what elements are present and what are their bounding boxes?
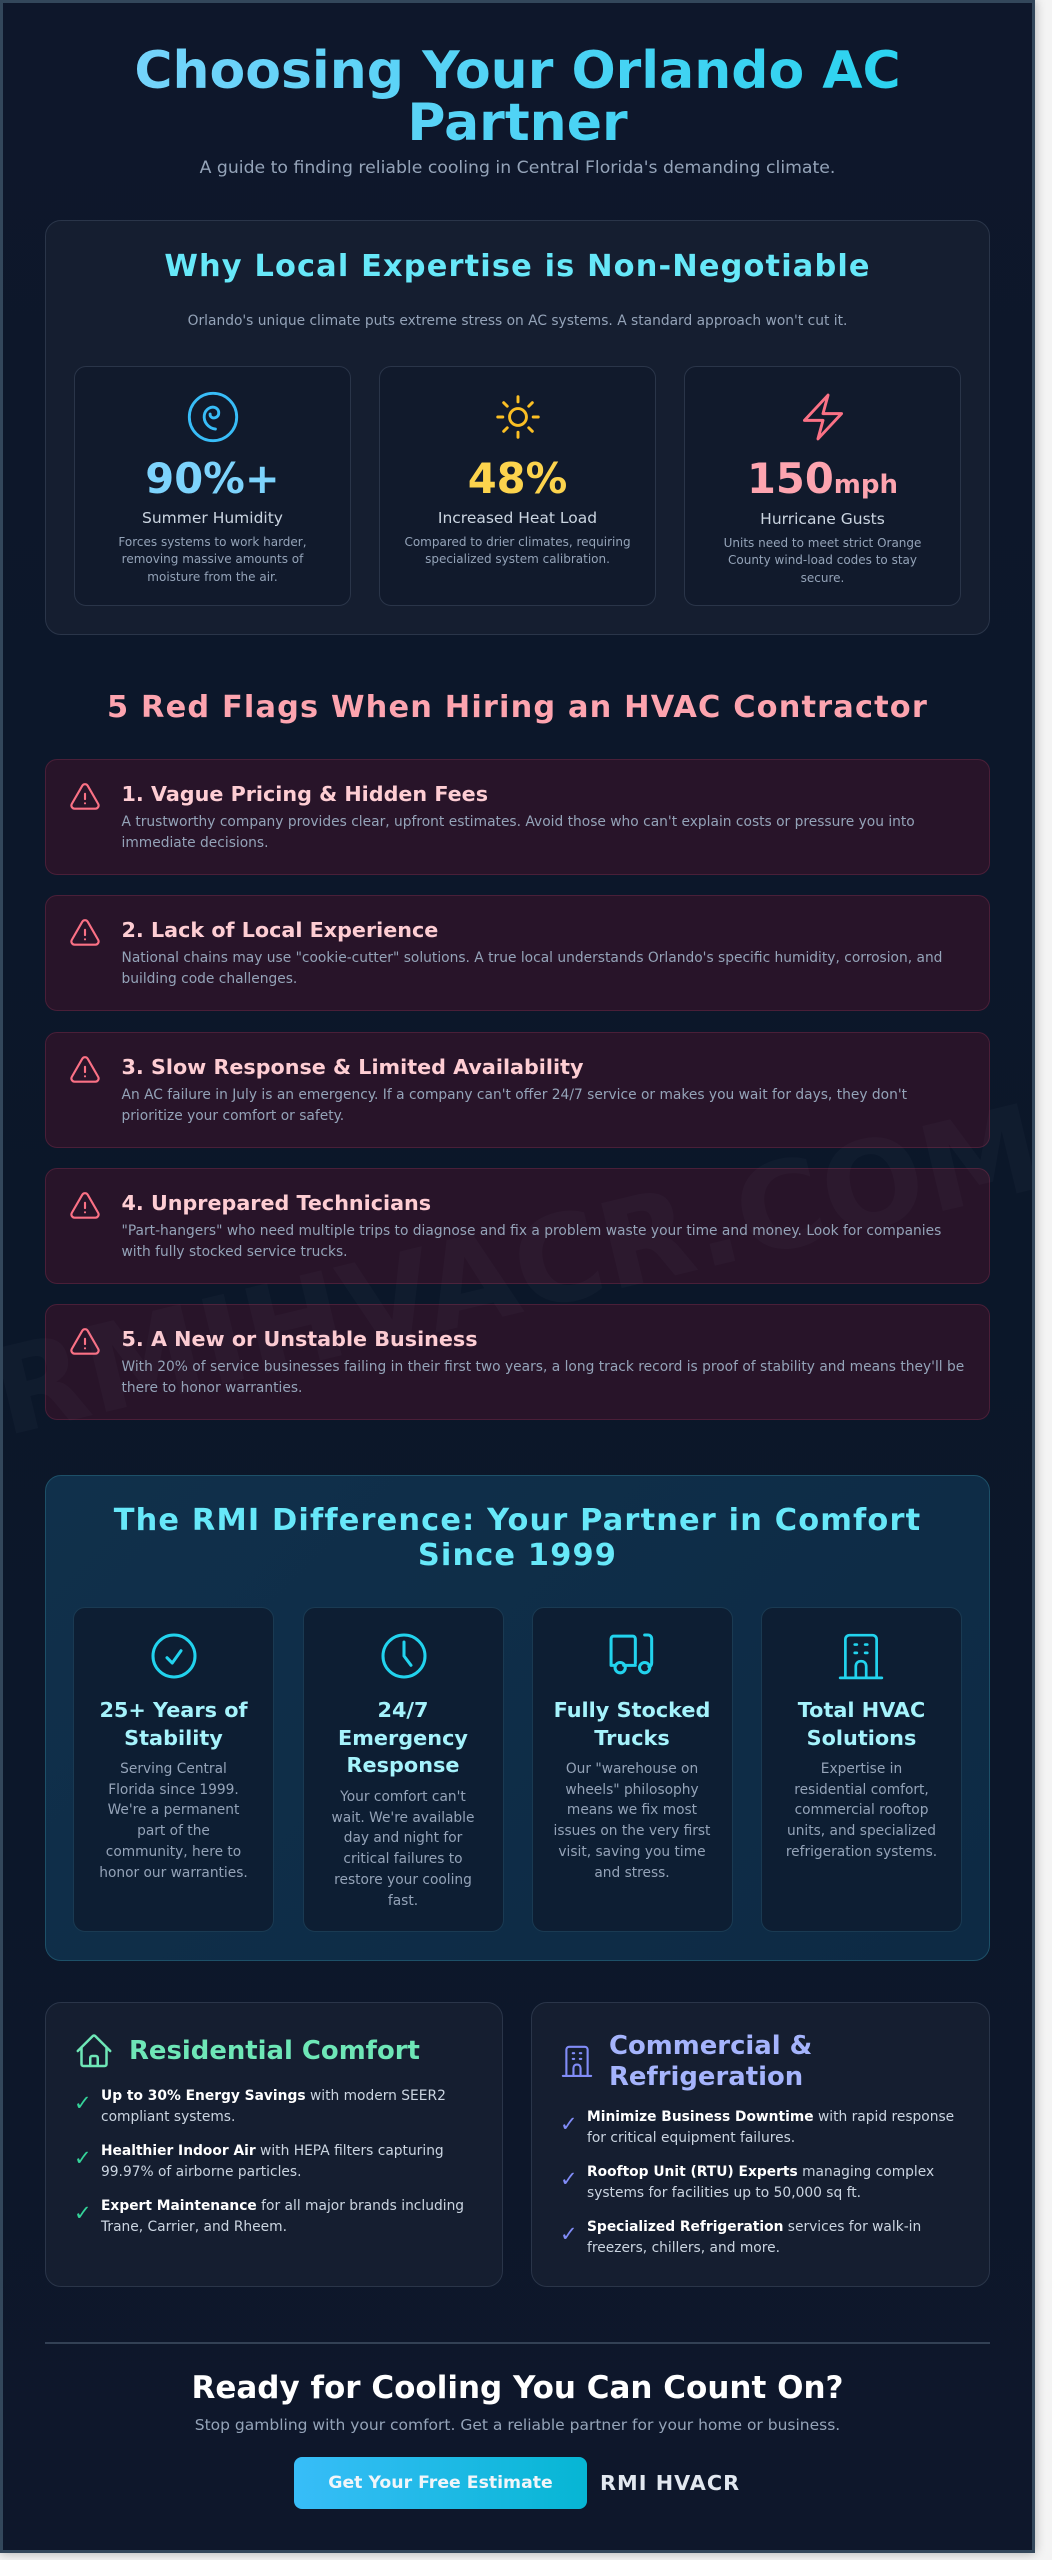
- benefit text: freezers, chillers, and more.: [587, 2240, 780, 2256]
- footer call to action: [45, 2365, 990, 2515]
- icon: truck: [610, 1634, 654, 1674]
- stat description: [118, 535, 307, 584]
- benefit text: Expert Maintenance for all major brands including: [101, 2198, 464, 2214]
- stat description: County wind-load codes to stay: [728, 553, 917, 567]
- stat number: 90%+: [145, 454, 280, 503]
- card text: fast.: [388, 1893, 418, 1909]
- stat label: Increased Heat Load: [438, 509, 597, 527]
- flag description: [122, 814, 915, 851]
- stat card: heat load: [379, 366, 656, 606]
- red flag 3: [45, 1032, 990, 1148]
- icon: warning: [70, 919, 100, 946]
- CTA heading: Ready for Cooling You Can Count On?: [191, 2370, 844, 2406]
- card title: Stability: [124, 1726, 223, 1750]
- card text: means we fix most: [567, 1802, 697, 1818]
- heading: Why Local Expertise is Non-Negotiable: [164, 249, 871, 284]
- benefit text: Healthier Indoor Air with HEPA filters capturing: [101, 2143, 444, 2159]
- card text: issues on the very first: [554, 1823, 710, 1839]
- check mark: ✓: [74, 2201, 92, 2225]
- card text: We're a permanent: [108, 1802, 239, 1818]
- benefit text: Minimize Business Downtime with rapid response: [587, 2109, 954, 2125]
- card text: community, here to: [106, 1844, 241, 1860]
- check mark: ✓: [74, 2146, 92, 2170]
- flag title: 3. Slow Response & Limited Availability: [122, 1055, 583, 1079]
- difference card: stability: [73, 1607, 274, 1932]
- benefit 1: [560, 2107, 980, 2149]
- flag description: [122, 1359, 964, 1396]
- card text: Your comfort can't: [340, 1789, 466, 1805]
- benefit text: [587, 2162, 934, 2203]
- subtitle: A guide to finding reliable cooling in Central Florida's demanding climate.: [200, 158, 835, 178]
- stat number: 150mph: [747, 454, 898, 503]
- icon: warning: [70, 1328, 100, 1355]
- benefit text: systems for facilities up to 50,000 sq ft.: [587, 2185, 861, 2201]
- card text: wheels" philosophy: [565, 1782, 699, 1798]
- card title: Trucks: [594, 1726, 670, 1750]
- card text: restore your cooling: [334, 1872, 472, 1888]
- stat description: moisture from the air.: [147, 570, 278, 584]
- CTA subtext: Stop gambling with your comfort. Get a reliable partner for your home or business.: [195, 2416, 840, 2434]
- card text: [332, 1789, 474, 1909]
- benefit 3: [560, 2217, 980, 2259]
- flag description: with fully stocked service trucks.: [122, 1244, 348, 1260]
- flag description: "Part-hangers" who need multiple trips to diagnose and fix a problem waste your time and money. Look for companies: [122, 1223, 941, 1239]
- card text: and stress.: [594, 1865, 670, 1881]
- icon: clock: [382, 1634, 426, 1678]
- difference card: emergency response: [302, 1607, 504, 1932]
- title: Partner: [407, 93, 628, 153]
- stat number: 48%: [468, 454, 567, 503]
- stat description: removing massive amounts of: [122, 552, 303, 566]
- card title: [554, 1698, 710, 1750]
- brand name: RMI HVACR: [600, 2471, 740, 2495]
- benefit text: Rooftop Unit (RTU) Experts managing complex: [587, 2164, 934, 2180]
- stat card: hurricane gusts: [684, 366, 961, 606]
- CTA button: [294, 2457, 587, 2509]
- panel: why local expertise: [45, 220, 990, 635]
- heading: The RMI Difference: Your Partner in Comfort: [114, 1503, 921, 1538]
- card text: residential comfort,: [794, 1782, 929, 1798]
- card text: Our "warehouse on: [566, 1761, 698, 1777]
- card title: Solutions: [807, 1726, 916, 1750]
- benefit text: 99.97% of airborne particles.: [101, 2164, 302, 2180]
- flag title: 1. Vague Pricing & Hidden Fees: [122, 782, 488, 806]
- benefit text: Trane, Carrier, and Rheem.: [101, 2219, 287, 2235]
- card text: wait. We're available: [332, 1810, 474, 1826]
- benefit text: [587, 2107, 954, 2148]
- flag title: 5. A New or Unstable Business: [122, 1327, 478, 1351]
- flag description: An AC failure in July is an emergency. If a company can't offer 24/7 service or makes you wait for days, they don't: [122, 1087, 907, 1103]
- panel title: [609, 2031, 812, 2092]
- flag description: National chains may use "cookie-cutter" solutions. A true local understands Orlando's specific humidity, corrosion, and: [122, 950, 942, 966]
- flag description: [122, 950, 942, 987]
- title: Choosing Your Orlando AC: [134, 41, 901, 101]
- benefit text: Specialized Refrigeration services for walk-in: [587, 2219, 921, 2235]
- check mark: ✓: [560, 2167, 578, 2191]
- flag description: there to honor warranties.: [122, 1380, 302, 1396]
- card text: day and night for: [344, 1830, 462, 1846]
- heading: Since 1999: [418, 1538, 617, 1572]
- difference card: stocked trucks: [532, 1607, 732, 1932]
- benefit 2: [560, 2162, 980, 2204]
- icon: home: [76, 2034, 112, 2068]
- panel title: Commercial &: [609, 2031, 812, 2061]
- card title: Total HVAC: [798, 1698, 925, 1722]
- card title: 24/7: [377, 1698, 428, 1722]
- red flag 5: [45, 1304, 990, 1420]
- benefit 2: [74, 2143, 444, 2180]
- card text: part of the: [137, 1823, 210, 1839]
- card title: [338, 1698, 468, 1777]
- flag description: prioritize your comfort or safety.: [122, 1108, 344, 1124]
- card text: units, and specialized: [787, 1823, 936, 1839]
- stat description: Compared to drier climates, requiring: [404, 535, 631, 549]
- panel title: Residential Comfort: [129, 2036, 420, 2066]
- benefit text: [101, 2088, 446, 2125]
- card text: commercial rooftop: [795, 1802, 928, 1818]
- icon: check circle: [152, 1634, 196, 1678]
- card title: [798, 1698, 925, 1750]
- icon: sun: [496, 395, 540, 439]
- card text: visit, saving you time: [558, 1844, 706, 1860]
- card text: honor our warranties.: [99, 1865, 248, 1881]
- icon: warning: [70, 783, 100, 810]
- card title: Emergency: [338, 1726, 468, 1750]
- heading: [114, 1503, 921, 1572]
- card text: Expertise in: [821, 1761, 902, 1777]
- CTA button: Get Your Free Estimate: [328, 2473, 553, 2493]
- flag description: [122, 1223, 941, 1260]
- flag title: 4. Unprepared Technicians: [122, 1191, 431, 1215]
- card text: Serving Central: [120, 1761, 227, 1777]
- flag description: A trustworthy company provides clear, upfront estimates. Avoid those who can't explain costs or pressure you into: [122, 814, 915, 830]
- benefit 3: [74, 2198, 464, 2235]
- stat description: [724, 536, 921, 585]
- check mark: ✓: [74, 2091, 92, 2115]
- icon: humidity swirl: [188, 392, 238, 442]
- intro text: Orlando's unique climate puts extreme stress on AC systems. A standard approach won't cut it.: [188, 313, 847, 329]
- difference card: total solutions: [761, 1607, 962, 1932]
- flag title: 2. Lack of Local Experience: [122, 918, 438, 942]
- card title: 25+ Years of: [99, 1698, 248, 1722]
- panel title: Refrigeration: [609, 2062, 803, 2092]
- stat description: secure.: [801, 571, 844, 585]
- icon: office building: [562, 2046, 592, 2077]
- flag description: building code challenges.: [122, 971, 297, 987]
- card text: [786, 1761, 937, 1860]
- icon: lightning bolt: [803, 394, 843, 440]
- benefit text: Up to 30% Energy Savings with modern SEER2: [101, 2088, 446, 2104]
- red flag 1: [45, 759, 990, 875]
- card text: [554, 1761, 710, 1881]
- stat label: Summer Humidity: [142, 509, 283, 527]
- benefit text: for critical equipment failures.: [587, 2130, 795, 2146]
- panel: residential comfort: [45, 2002, 503, 2287]
- stat description: Units need to meet strict Orange: [724, 536, 921, 550]
- benefit text: [587, 2217, 921, 2258]
- check mark: ✓: [560, 2222, 578, 2246]
- card title: Fully Stocked: [554, 1698, 710, 1722]
- stat description: Forces systems to work harder,: [118, 535, 307, 549]
- panel: the RMI difference: [45, 1475, 990, 1961]
- flag description: immediate decisions.: [122, 835, 268, 851]
- title: [45, 45, 990, 149]
- red flags heading: 5 Red Flags When Hiring an HVAC Contractor: [107, 690, 928, 725]
- red flag 2: [45, 895, 990, 1011]
- card text: critical failures to: [343, 1851, 463, 1867]
- icon: warning: [70, 1192, 100, 1219]
- card title: Response: [347, 1753, 459, 1777]
- card text: [99, 1761, 248, 1881]
- card title: [99, 1698, 248, 1750]
- icon: warning: [70, 1056, 100, 1083]
- icon: building: [838, 1634, 884, 1680]
- stat description: [404, 535, 631, 566]
- panel: commercial and refrigeration: [531, 2002, 990, 2287]
- stat description: specialized system calibration.: [425, 552, 610, 566]
- card text: Florida since 1999.: [108, 1782, 239, 1798]
- flag description: With 20% of service businesses failing in their first two years, a long track record is proof of stability and means they'll be: [122, 1359, 964, 1375]
- benefit 1: [74, 2088, 446, 2125]
- page header: [134, 41, 901, 178]
- benefit text: [100, 2198, 464, 2235]
- flag description: [122, 1087, 907, 1124]
- benefit text: compliant systems.: [101, 2109, 235, 2125]
- check mark: ✓: [560, 2112, 578, 2136]
- card text: refrigeration systems.: [786, 1844, 937, 1860]
- red flag 4: [45, 1168, 990, 1284]
- stat card: humidity: [74, 366, 351, 606]
- benefit text: [101, 2143, 444, 2180]
- stat label: Hurricane Gusts: [760, 510, 885, 528]
